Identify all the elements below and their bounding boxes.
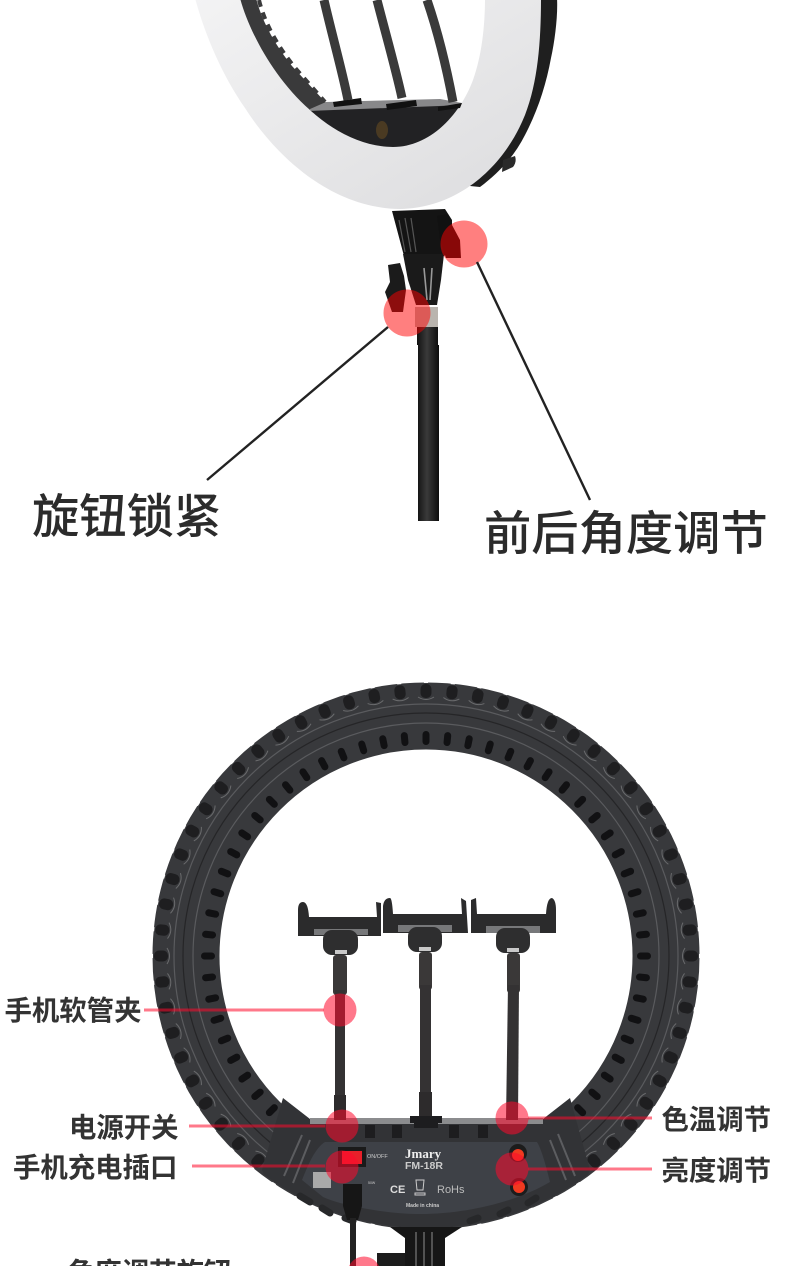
groove lines: [174, 704, 678, 1208]
gooseneck 2: [377, 0, 402, 98]
bottom slots: [365, 1125, 488, 1138]
left body ribs: [284, 1134, 575, 1183]
gooseneck 3: [427, 0, 453, 102]
grey top strip: [310, 1118, 543, 1124]
label: 电源开关: [69, 1112, 179, 1143]
marker: [496, 1152, 528, 1186]
spec text: 50W: [368, 1181, 376, 1185]
leader line: tilt adjustment: [477, 262, 590, 500]
CE mark: CE: [390, 1184, 405, 1196]
label: 亮度调节: [662, 1155, 771, 1186]
clip 3: [471, 898, 556, 1120]
photo: stand head and pole: [385, 209, 461, 521]
label: 色温调节: [662, 1104, 771, 1135]
marker: tilt adjustment: [440, 220, 488, 268]
notches around ring: [102, 632, 750, 1266]
collar: [403, 254, 444, 305]
leader line: [528, 1168, 652, 1170]
pole: [417, 327, 439, 521]
marker: [326, 1110, 358, 1142]
power plug: [343, 1184, 362, 1220]
marker: [348, 1256, 380, 1266]
leader line: [144, 1008, 324, 1012]
marker: [496, 1102, 528, 1134]
clip 2: [383, 898, 468, 1116]
camera hole: [376, 121, 388, 139]
callout: phone charging port: [13, 1150, 358, 1184]
marker: [326, 1150, 358, 1184]
lock knob: [385, 263, 406, 312]
RoHS mark: RoHs: [437, 1184, 465, 1196]
callout: colour temperature: [496, 1102, 771, 1135]
white diffuser ring: [195, 0, 541, 209]
control panel: [302, 1142, 550, 1214]
heading: tilt adjustment: 前后角度调节: [484, 508, 768, 561]
label: 手机软管夹: [4, 995, 141, 1026]
grey top of shelf: [310, 99, 462, 113]
leader line: [189, 1124, 325, 1128]
marker: [324, 994, 356, 1026]
callout: phone gooseneck clip: [4, 994, 356, 1026]
callout: angle knob: [67, 1256, 380, 1266]
bracket silver screws: [335, 947, 519, 954]
callout: brightness: [496, 1152, 771, 1186]
gooseneck feet: [333, 98, 462, 111]
bottom body: [266, 1098, 586, 1227]
silver ring: [415, 307, 438, 327]
tilt knob: [437, 214, 461, 258]
made in china: Made in china: [406, 1203, 439, 1209]
photo: ring light front, angled: [195, 0, 557, 209]
model: FM-18R: [405, 1160, 443, 1172]
leader line: [528, 1116, 652, 1120]
brand: Jmary: [405, 1146, 442, 1161]
clip 1: [298, 902, 381, 1120]
cable: [350, 1218, 356, 1266]
body lower bumps: [300, 1196, 536, 1221]
on off label: ON/OFF: [367, 1154, 388, 1160]
leader line: lock knob: [207, 327, 388, 480]
label: 手机充电插口: [13, 1152, 177, 1183]
toothed rim: [238, 0, 327, 114]
photo: ring light back: [152, 682, 700, 1266]
ring back housing: [470, 0, 557, 187]
knob sockets: [509, 1144, 527, 1162]
accessory foot: [410, 1116, 442, 1128]
red knobs: [512, 1149, 524, 1161]
USB ports: [313, 1172, 331, 1188]
heading: lock knob: 旋钮锁紧: [32, 491, 221, 544]
lower mount: [390, 1227, 462, 1266]
callout: power switch: [69, 1110, 358, 1143]
gooseneck 1: [324, 0, 348, 100]
black shelf: [310, 106, 458, 147]
power switch: [338, 1147, 366, 1167]
phone clips: [298, 898, 556, 1120]
recycling mark: [415, 1180, 425, 1195]
inner back rim and control shelf: [238, 0, 470, 155]
marker: lock knob: [384, 290, 430, 336]
ring body: [186, 716, 666, 1196]
bracket: [392, 209, 452, 256]
mount side block: [377, 1253, 405, 1266]
side control bump: [502, 156, 516, 172]
leader line: [192, 1164, 325, 1168]
inner opening: [240, 0, 485, 147]
